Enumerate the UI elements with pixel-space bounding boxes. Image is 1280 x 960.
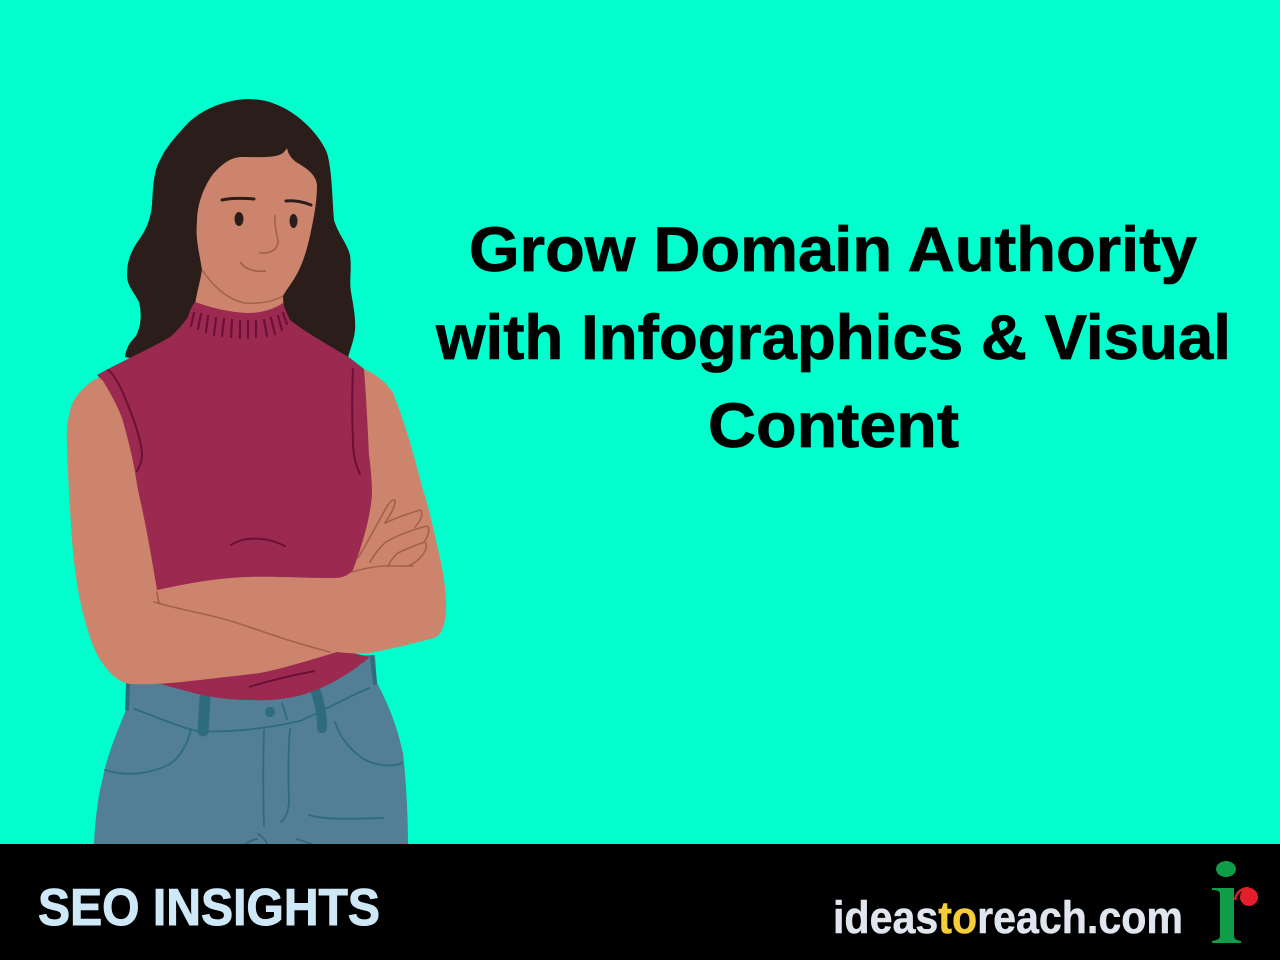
jeans	[94, 655, 408, 844]
hair	[125, 99, 355, 380]
jeans details	[105, 657, 402, 844]
title: Content	[708, 391, 959, 461]
skin: arms	[67, 369, 446, 684]
footer label: SEO INSIGHTS: SEO INSIGHTS	[38, 879, 380, 937]
shirt body	[97, 302, 372, 590]
icon: ir logo	[1212, 861, 1258, 943]
facial features	[202, 198, 311, 303]
shirt hem crease	[249, 671, 315, 687]
shirt details	[108, 313, 360, 546]
shirt hem	[153, 650, 370, 700]
neck and face	[195, 148, 317, 318]
title: Grow Domain Authority	[469, 215, 1197, 285]
illustration: woman with crossed arms	[67, 99, 446, 844]
title	[435, 215, 1231, 461]
title: with Infographics & Visual	[435, 303, 1231, 373]
website address: ideastoreach.com	[833, 892, 1183, 943]
hand and arm creases	[154, 500, 429, 652]
footer band	[0, 844, 1280, 960]
